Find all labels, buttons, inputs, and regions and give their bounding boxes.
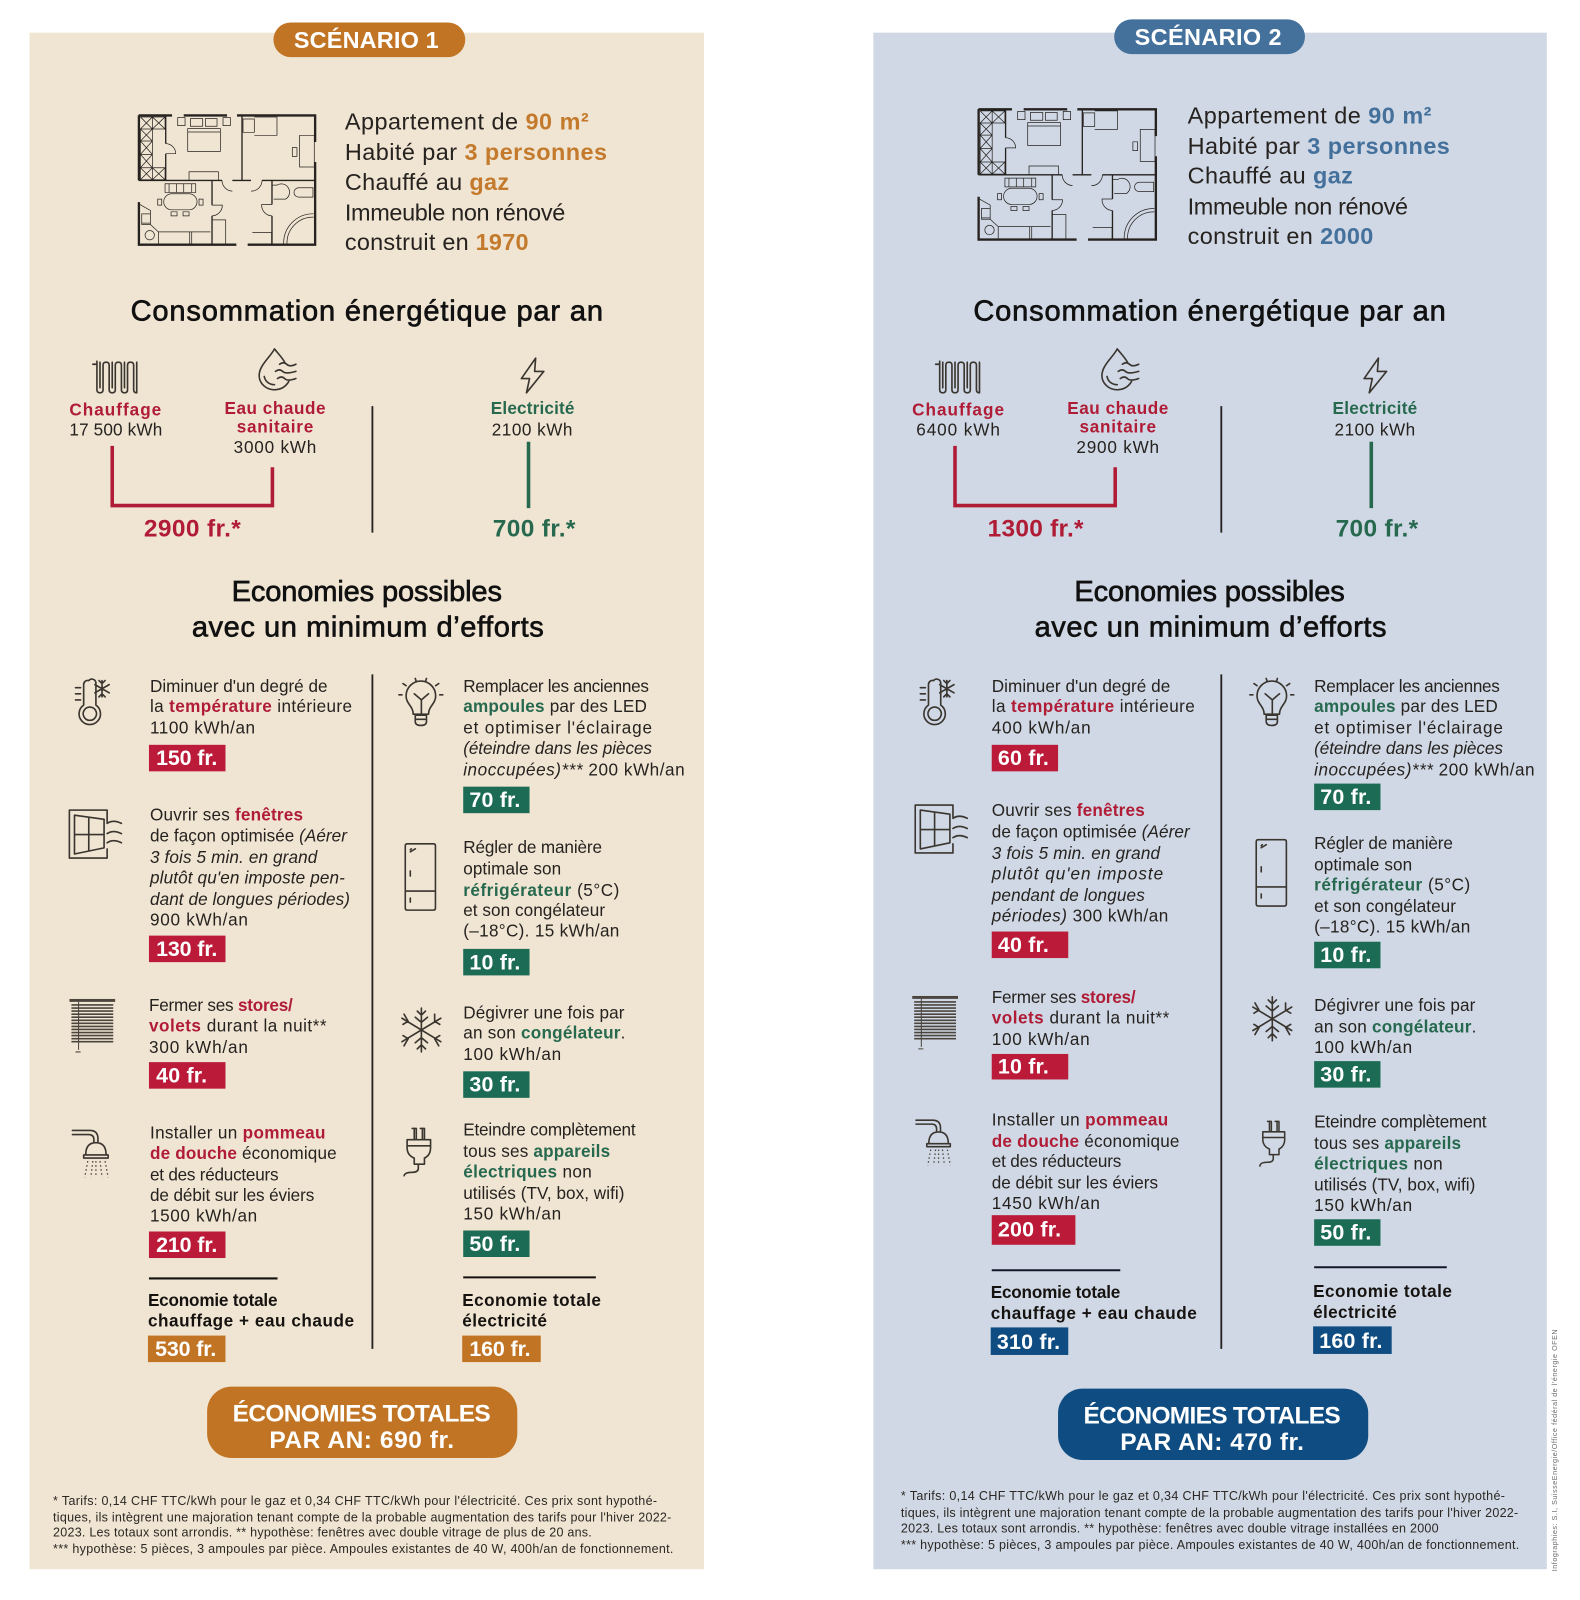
total: chauffage + eau chaude: Economie totale	[991, 1282, 1120, 1302]
tip: pommeau: de débit sur les éviers	[992, 1173, 1158, 1193]
tip: ampoules	[463, 676, 685, 813]
total: électricité: électricité	[462, 1310, 547, 1330]
total: chauffage + eau chaude	[148, 1290, 354, 1362]
credit: Infographies: S.I, SuisseEnergie/Office fédéral de l'énergie OFEN	[1551, 1329, 1559, 1571]
heading: économies: Economies possibles	[1074, 576, 1345, 608]
tip: ampoules: ampoules par des LED	[463, 696, 647, 716]
tip: réfrigérateur: 10 fr.	[1320, 943, 1371, 967]
tip: congélateur	[1314, 995, 1476, 1088]
tip: stores	[992, 987, 1170, 1079]
tip: congélateur: 30 fr.	[1320, 1063, 1371, 1087]
badge: scénario 1: SCÉNARIO 1	[294, 26, 439, 53]
icon: blinds	[912, 996, 958, 1049]
cost: électricité: 700 fr.*	[493, 516, 576, 543]
tip: stores: Fermer ses stores/	[149, 995, 293, 1015]
tip: fenêtres: Ouvrir ses fenêtres	[150, 804, 303, 824]
cost: chauffage: 2900 fr.*	[144, 516, 241, 543]
tip: ampoules: (éteindre dans les pièces	[463, 738, 652, 758]
label: électricité: Electricité	[491, 398, 574, 418]
icon: fridge	[1256, 840, 1286, 906]
label: eau chaude: sanitaire	[237, 417, 313, 437]
icon: blinds	[69, 999, 115, 1052]
tip: congélateur: 100 kWh/an	[463, 1044, 561, 1064]
tip: ampoules: et optimiser l'éclairage	[463, 718, 652, 738]
icon: thermometer	[920, 679, 954, 725]
apartment description: construit en 1970	[345, 229, 529, 255]
tip: fenêtres: plutôt qu'en imposte	[991, 863, 1163, 883]
total: électricité: 160 fr.	[469, 1337, 531, 1361]
total savings pill: ÉCONOMIES TOTALES	[1084, 1401, 1341, 1429]
floor plan	[139, 115, 315, 245]
heading: consommation: Consommation énergétique par an	[973, 295, 1446, 327]
tip: réfrigérateur: (–18°C). 15 kWh/an	[1314, 917, 1470, 937]
footnote	[901, 1489, 1519, 1552]
tip: congélateur: Dégivrer une fois par	[1314, 995, 1476, 1015]
tip: ampoules: inoccupées)*** 200 kWh/an	[463, 759, 685, 779]
tip: température: 400 kWh/an	[992, 718, 1091, 738]
icon: hot water drop	[259, 349, 296, 390]
total: chauffage + eau chaude: chauffage + eau chaude	[148, 1310, 354, 1330]
tip: appareils: 50 fr.	[469, 1232, 520, 1256]
total: électricité	[1313, 1281, 1452, 1354]
tip: pommeau: et des réducteurs	[992, 1151, 1121, 1171]
apartment description: Habité par 3 personnes	[1188, 133, 1450, 159]
total: chauffage + eau chaude	[991, 1282, 1197, 1355]
tip: ampoules: et optimiser l'éclairage	[1314, 718, 1503, 738]
tip: ampoules: 70 fr.	[469, 788, 520, 812]
tip: fenêtres: Ouvrir ses fenêtres	[992, 800, 1145, 820]
label: chauffage: Chauffage	[69, 399, 161, 419]
tip: pommeau	[992, 1109, 1179, 1245]
icon: lightning bolt	[521, 358, 544, 393]
tip: ampoules: inoccupées)*** 200 kWh/an	[1314, 759, 1535, 779]
total: électricité: Economie totale	[462, 1290, 601, 1310]
footnote: 2023. Les totaux sont arrondis. ** hypothèse: fenêtres avec double vitrage de plus de 20 ans.	[53, 1526, 592, 1540]
icon: snowflake	[1253, 997, 1292, 1041]
tip: température: 1100 kWh/an	[150, 718, 255, 738]
total: chauffage + eau chaude: 310 fr.	[997, 1330, 1060, 1354]
icon: fridge	[405, 844, 435, 910]
tip: congélateur: an son congélateur.	[1314, 1017, 1476, 1037]
apartment description	[1188, 102, 1450, 249]
label: eau chaude: sanitaire	[1079, 417, 1156, 437]
tip: stores: volets durant la nuit**	[149, 1016, 327, 1036]
tip: fenêtres	[149, 804, 350, 962]
tip: stores: 300 kWh/an	[149, 1037, 248, 1057]
floor plan	[978, 109, 1156, 240]
badge: scénario 2	[1114, 19, 1305, 54]
footnote: *** hypothèse: 5 pièces, 3 ampoules par pièce. Ampoules existantes de 40 W, 400h/an de fonctionnement.	[53, 1542, 673, 1556]
total: chauffage + eau chaude: Economie totale	[148, 1290, 278, 1310]
total savings pill: PAR AN: 470 fr.	[1120, 1429, 1304, 1456]
label: chauffage: 17 500 kWh	[69, 420, 162, 440]
apartment description: Immeuble non rénové	[1188, 193, 1408, 219]
tip: réfrigérateur: optimale son	[463, 858, 561, 878]
total savings pill: PAR AN: 690 fr.	[269, 1427, 454, 1454]
total: chauffage + eau chaude: chauffage + eau chaude	[991, 1303, 1197, 1323]
apartment description: Habité par 3 personnes	[345, 139, 607, 165]
icon: radiator	[93, 361, 137, 393]
bar: électricité	[1370, 442, 1373, 508]
tip: pommeau: Installer un pommeau	[992, 1109, 1168, 1129]
tip: fenêtres: 900 kWh/an	[150, 909, 248, 929]
apartment description	[345, 109, 607, 255]
tip: appareils: 150 kWh/an	[463, 1203, 561, 1223]
tip: fenêtres: dant de longues périodes)	[150, 889, 350, 909]
label: eau chaude: Eau chaude	[1067, 398, 1168, 418]
tip: stores: 10 fr.	[998, 1054, 1049, 1078]
tip: fenêtres: 130 fr.	[156, 937, 217, 961]
tip: appareils: 50 fr.	[1320, 1221, 1371, 1245]
label: électricité: 2100 kWh	[1335, 420, 1415, 440]
tip: réfrigérateur: Régler de manière	[463, 837, 602, 857]
label: électricité	[1333, 398, 1417, 440]
label: eau chaude	[1067, 398, 1168, 457]
label: électricité: Electricité	[1333, 398, 1417, 418]
tip: réfrigérateur: et son congélateur	[463, 900, 605, 920]
label: électricité	[491, 398, 574, 440]
cost: chauffage: 1300 fr.*	[988, 516, 1084, 543]
tip: réfrigérateur: Régler de manière	[1314, 833, 1453, 853]
icon: shower head	[72, 1130, 108, 1177]
apartment description: Immeuble non rénové	[345, 199, 565, 225]
tip: réfrigérateur: optimale son	[1314, 854, 1412, 874]
apartment description: Chauffé au gaz	[345, 169, 509, 195]
apartment description: Appartement de 90 m²	[1188, 102, 1432, 128]
heading: économies	[1035, 576, 1387, 644]
tip: ampoules: 70 fr.	[1320, 785, 1371, 809]
label: chauffage	[912, 399, 1004, 440]
icon: snowflake	[402, 1008, 441, 1052]
bracket: chauffage + eau chaude	[112, 446, 272, 506]
tip: appareils: électriques non	[463, 1161, 592, 1181]
tip: appareils: Eteindre complètement	[463, 1120, 636, 1140]
tip: ampoules: Remplacer les anciennes	[1314, 676, 1500, 696]
label: eau chaude: 2900 kWh	[1076, 437, 1159, 457]
tip: appareils: utilisés (TV, box, wifi)	[1314, 1175, 1475, 1195]
total: chauffage + eau chaude: 530 fr.	[155, 1337, 216, 1361]
label: chauffage: 6400 kWh	[916, 420, 1000, 440]
total savings pill	[1058, 1389, 1368, 1460]
tip: appareils: Eteindre complètement	[1314, 1111, 1487, 1131]
tip: température: 150 fr.	[156, 746, 217, 770]
tip: température: 60 fr.	[998, 746, 1049, 770]
tip: fenêtres	[991, 800, 1191, 958]
tip: pommeau: de douche économique	[992, 1131, 1179, 1151]
footnote: tiques, ils intègrent une majoration tenant compte de la probable augmentation des tarifs pour l'hiver 2022-	[53, 1510, 671, 1524]
tip: réfrigérateur	[1314, 833, 1470, 968]
tip: appareils: tous ses appareils	[1314, 1133, 1461, 1153]
icon: window	[69, 810, 121, 858]
tip: stores: 40 fr.	[156, 1064, 207, 1088]
icon: lightning bolt	[1364, 358, 1387, 393]
tip: ampoules: ampoules par des LED	[1314, 696, 1498, 716]
tip: pommeau: 1450 kWh/an	[992, 1193, 1100, 1213]
tip: congélateur: Dégivrer une fois par	[463, 1002, 625, 1022]
tip: pommeau	[149, 1123, 337, 1258]
footnote: *** hypothèse: 5 pièces, 3 ampoules par pièce. Ampoules existantes de 40 W, 400h/an de fonctionnement.	[901, 1538, 1519, 1552]
total: électricité	[462, 1290, 601, 1362]
tip: stores	[149, 995, 327, 1089]
label: eau chaude: Eau chaude	[224, 398, 325, 418]
total: électricité: 160 fr.	[1319, 1329, 1383, 1353]
total savings pill: ÉCONOMIES TOTALES	[233, 1399, 491, 1427]
apartment description: Chauffé au gaz	[1188, 163, 1353, 189]
footnote: 2023. Les totaux sont arrondis. ** hypothèse: fenêtres avec double vitrage installées en 2000	[901, 1521, 1439, 1535]
heading: économies: avec un minimum d’efforts	[192, 612, 544, 644]
icon: plug	[1260, 1121, 1285, 1166]
footnote: tiques, ils intègrent une majoration tenant compte de la probable augmentation des tarifs pour l'hiver 2022-	[901, 1506, 1518, 1520]
apartment description: Appartement de 90 m²	[345, 109, 589, 135]
icon: shower head	[916, 1120, 950, 1165]
tip: fenêtres: 3 fois 5 min. en grand	[150, 847, 318, 867]
tip: congélateur	[463, 1002, 625, 1098]
tip: appareils: électriques non	[1314, 1153, 1443, 1173]
label: eau chaude	[224, 398, 325, 457]
tip: stores: Fermer ses stores/	[992, 987, 1136, 1007]
heading: économies	[192, 576, 544, 644]
tip: stores: volets durant la nuit**	[992, 1007, 1170, 1027]
total: électricité: électricité	[1313, 1302, 1397, 1322]
apartment description: construit en 2000	[1188, 223, 1373, 249]
icon: plug	[404, 1128, 431, 1176]
tip: fenêtres: pendant de longues	[991, 885, 1145, 905]
tip: appareils	[463, 1120, 636, 1257]
total: électricité: Economie totale	[1313, 1281, 1452, 1301]
tip: réfrigérateur: et son congélateur	[1314, 896, 1456, 916]
heading: économies: avec un minimum d’efforts	[1035, 612, 1387, 644]
tip: appareils: utilisés (TV, box, wifi)	[463, 1183, 624, 1203]
tip: réfrigérateur: 10 fr.	[469, 950, 520, 974]
tip: pommeau: 210 fr.	[156, 1233, 217, 1257]
badge: scénario 2: SCÉNARIO 2	[1135, 23, 1281, 50]
tip: réfrigérateur: réfrigérateur (5°C)	[1314, 875, 1470, 895]
tip: ampoules: (éteindre dans les pièces	[1314, 738, 1503, 758]
tip: fenêtres: périodes) 300 kWh/an	[991, 905, 1168, 925]
tip: pommeau: et des réducteurs	[150, 1164, 279, 1184]
heading: consommation: Consommation énergétique par an	[131, 295, 603, 327]
icon: thermometer	[76, 679, 109, 725]
tip: congélateur: an son congélateur.	[463, 1023, 625, 1043]
tip: température: la température intérieure	[992, 696, 1195, 716]
tip: réfrigérateur	[463, 837, 619, 975]
tip: pommeau: de douche économique	[150, 1143, 337, 1163]
tip: fenêtres: 40 fr.	[998, 933, 1049, 957]
tip: appareils: tous ses appareils	[463, 1141, 610, 1161]
panel: scénario 2	[873, 19, 1547, 1569]
tip: fenêtres: 3 fois 5 min. en grand	[992, 843, 1161, 863]
label: électricité: 2100 kWh	[492, 420, 572, 440]
icon: light bulb	[399, 678, 443, 725]
bar: électricité	[527, 442, 530, 508]
bracket: chauffage + eau chaude	[955, 446, 1115, 506]
tip: pommeau: 1500 kWh/an	[150, 1205, 257, 1225]
tip: température: Diminuer d'un degré de	[150, 676, 328, 696]
tip: stores: 100 kWh/an	[992, 1029, 1090, 1049]
tip: fenêtres: de façon optimisée (Aérer	[150, 826, 348, 846]
tip: pommeau: 200 fr.	[998, 1218, 1061, 1242]
tip: température: Diminuer d'un degré de	[992, 676, 1170, 696]
tip: ampoules	[1314, 676, 1535, 810]
tip: réfrigérateur: (–18°C). 15 kWh/an	[463, 921, 619, 941]
cost: électricité: 700 fr.*	[1336, 516, 1419, 543]
tip: température	[149, 676, 352, 771]
tip: congélateur: 30 fr.	[469, 1073, 520, 1097]
footnote: * Tarifs: 0,14 CHF TTC/kWh pour le gaz et 0,34 CHF TTC/kWh pour l'électricité. Ces prix sont hypothé-	[901, 1489, 1505, 1503]
tip: fenêtres: de façon optimisée (Aérer	[992, 822, 1191, 842]
footnote: * Tarifs: 0,14 CHF TTC/kWh pour le gaz et 0,34 CHF TTC/kWh pour l'électricité. Ces prix sont hypothé-	[53, 1494, 657, 1508]
tip: appareils	[1314, 1111, 1487, 1246]
badge: scénario 1	[273, 22, 465, 57]
panel: scénario 1	[30, 22, 704, 1569]
tip: ampoules: Remplacer les anciennes	[463, 676, 649, 696]
tip: pommeau: de débit sur les éviers	[150, 1185, 314, 1205]
tip: pommeau: Installer un pommeau	[150, 1123, 325, 1143]
footnote	[53, 1494, 673, 1556]
icon: radiator	[936, 361, 979, 393]
icon: window	[915, 805, 967, 853]
icon: hot water drop	[1102, 349, 1139, 390]
tip: température: la température intérieure	[150, 696, 352, 716]
label: eau chaude: 3000 kWh	[234, 437, 316, 457]
tip: appareils: 150 kWh/an	[1314, 1195, 1412, 1215]
tip: température	[992, 676, 1195, 771]
total savings pill	[207, 1387, 517, 1458]
tip: réfrigérateur: réfrigérateur (5°C)	[463, 880, 619, 900]
icon: light bulb	[1250, 678, 1294, 725]
tip: fenêtres: plutôt qu'en imposte pen-	[149, 868, 345, 888]
tip: congélateur: 100 kWh/an	[1314, 1037, 1412, 1057]
heading: économies: Economies possibles	[232, 576, 502, 608]
label: chauffage	[69, 399, 162, 440]
label: chauffage: Chauffage	[912, 399, 1004, 419]
